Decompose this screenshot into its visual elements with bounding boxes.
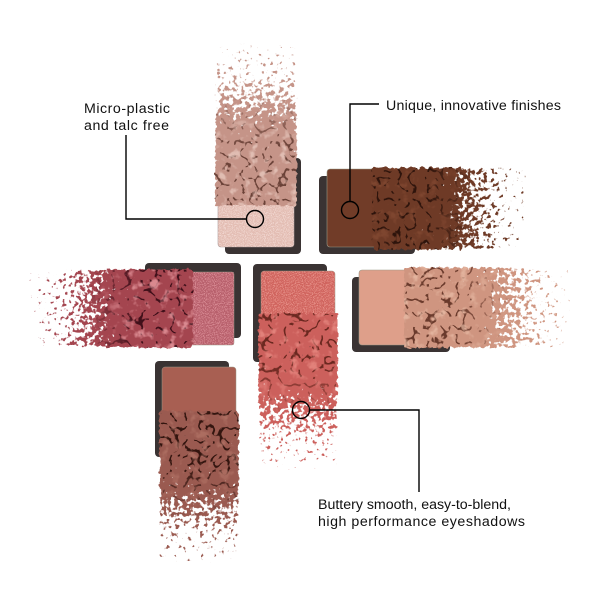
callout: unique, innovative finishes: Unique, innovative finishes bbox=[386, 98, 561, 114]
callout: buttery smooth eyeshadows: Buttery smooth, easy-to-blend, bbox=[318, 497, 511, 513]
eyeshadow: mauve rose shimmer bbox=[30, 263, 241, 349]
callout: buttery smooth eyeshadows: high performance eyeshadows bbox=[318, 514, 525, 530]
eyeshadow: peach matte bbox=[352, 266, 570, 352]
callout: micro-plastic and talc free bbox=[84, 101, 264, 228]
callout: micro-plastic and talc free: and talc free bbox=[84, 118, 169, 134]
callout: buttery smooth eyeshadows bbox=[292, 402, 525, 530]
callout: unique, innovative finishes bbox=[342, 98, 561, 218]
eyeshadow: dusty terracotta matte bbox=[155, 361, 240, 562]
eyeshadow: pale pink shimmer bbox=[214, 44, 301, 254]
eyeshadow: deep brown matte bbox=[319, 166, 526, 254]
eyeshadow: coral shimmer bbox=[253, 264, 339, 470]
callout: micro-plastic and talc free: Micro-plastic bbox=[84, 101, 170, 117]
